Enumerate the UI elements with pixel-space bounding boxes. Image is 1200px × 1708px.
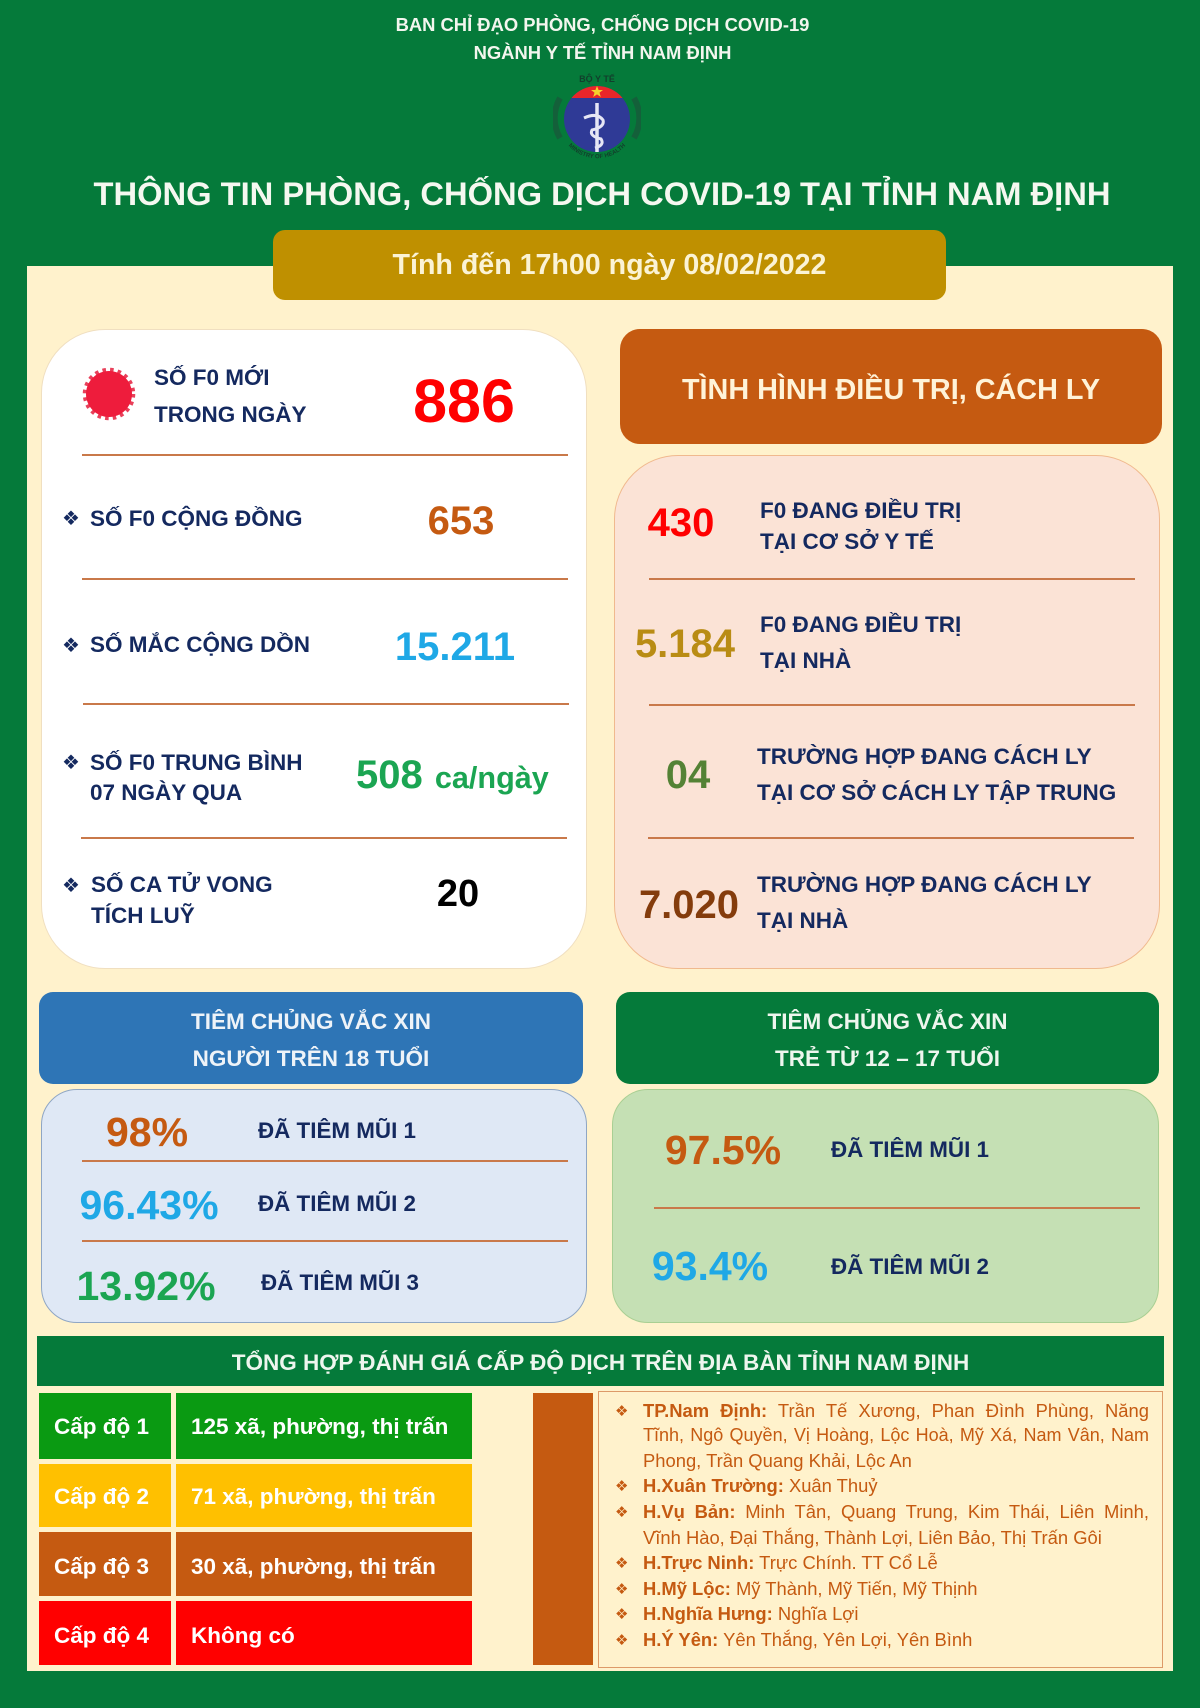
main title: THÔNG TIN PHÒNG, CHỐNG DỊCH COVID-19 TẠI TỈNH NAM ĐỊNH [94, 175, 1110, 212]
value: 97.5%: 97.5% [665, 1127, 781, 1173]
bullet: Nghia Hung: ❖ [615, 1605, 628, 1623]
level 2 name [39, 1464, 171, 1527]
level 4 name [39, 1601, 171, 1665]
level 2 name: Cấp độ 2 [54, 1484, 149, 1509]
header line 2: NGÀNH Y TẾ TỈNH NAM ĐỊNH [474, 42, 731, 63]
panel: cream background [27, 266, 1173, 1671]
value: 13.92%: 13.92% [76, 1263, 216, 1309]
level 3 name: Cấp độ 3 [54, 1554, 149, 1579]
panel: level 3 communes list [598, 1391, 1163, 1668]
value: 653: 653 [428, 499, 494, 543]
label: cumulative deaths: SỐ CA TỬ VONG [91, 872, 273, 897]
connector bar [533, 1393, 593, 1665]
value: 430: 430 [648, 501, 714, 545]
label: dose 3: ĐÃ TIÊM MŨI 3 [261, 1270, 419, 1295]
heading: vaccination adults: TIÊM CHỦNG VẮC XIN [191, 1009, 431, 1034]
value: 886: 886 [413, 367, 515, 435]
bullet: Xuan Truong: ❖ [615, 1477, 628, 1495]
label: dose 2: ĐÃ TIÊM MŨI 2 [258, 1191, 416, 1216]
text: Truc Ninh: H.Trực Ninh: Trực Chính. TT Cổ Lễ [643, 1552, 938, 1573]
heading: vaccination ages 12-17 [616, 992, 1159, 1084]
label: last seven days: 07 NGÀY QUA [90, 780, 242, 805]
label: dose 1: ĐÃ TIÊM MŨI 1 [831, 1137, 989, 1162]
bullet: My Loc: ❖ [615, 1580, 628, 1598]
text: Nam Dinh city line 3: Phong, Trần Quang Khải, Lộc An [643, 1450, 912, 1471]
label: quarantine cases at home: TRƯỜNG HỢP ĐANG CÁCH LY [757, 872, 1092, 897]
level 3 name [39, 1532, 171, 1596]
heading: treatment and quarantine [620, 329, 1162, 444]
level 3 count: 30 xã, phường, thị trấn [191, 1554, 436, 1579]
bullet: Truc Ninh: ❖ [615, 1554, 628, 1572]
label: dose 2: ĐÃ TIÊM MŨI 2 [831, 1254, 989, 1279]
icon: virus [82, 368, 136, 420]
icon: ministry of health emblem: MINISTRY OF HEALTH [568, 143, 626, 158]
text: Vu Ban line 1: H.Vụ Bản: Minh Tân, Quang Trung, Kim Thái, Liên Minh, [643, 1501, 1149, 1522]
heading: vaccination ages 12-17: TIÊM CHỦNG VẮC XIN [767, 1009, 1008, 1034]
level 2 count [176, 1464, 472, 1527]
label: at medical facilities: TẠI CƠ SỞ Y TẾ [760, 529, 934, 554]
text: Xuan Truong: H.Xuân Trường: Xuân Thuỷ [643, 1475, 878, 1496]
value: 7.020: 7.020 [639, 883, 739, 927]
date banner: Tính đến 17h00 ngày 08/02/2022 [393, 249, 826, 281]
level 4 count [176, 1601, 472, 1665]
bullet: deaths: ❖ [62, 873, 80, 897]
heading: treatment and quarantine: TÌNH HÌNH ĐIỀU TRỊ, CÁCH LY [682, 374, 1100, 406]
value: 508 per day: 508 ca/ngày [356, 753, 549, 797]
level 4 name: Cấp độ 4 [54, 1623, 149, 1648]
panel: adult vaccination [41, 1089, 587, 1323]
level 1 count: 125 xã, phường, thị trấn [191, 1414, 448, 1439]
heading: vaccination ages 12-17: TRẺ TỪ 12 – 17 TUỔI [775, 1046, 1000, 1071]
text: Y Yen: H.Ý Yên: Yên Thắng, Yên Lợi, Yên Bình [643, 1629, 972, 1650]
level 1 name [39, 1393, 171, 1459]
text: Nam Dinh city line 1: TP.Nam Định: Trần Tế Xương, Phan Đình Phùng, Năng [643, 1400, 1149, 1421]
value: 15.211: 15.211 [395, 625, 515, 669]
label: dose 1: ĐÃ TIÊM MŨI 1 [258, 1118, 416, 1143]
panel: treatment and quarantine [614, 455, 1160, 969]
level 4 count: Không có [191, 1623, 295, 1648]
label: in the day: TRONG NGÀY [154, 402, 307, 427]
label: cumulative cases: SỐ MẮC CỘNG DỒN [90, 632, 310, 657]
value: 98%: 98% [106, 1109, 188, 1155]
heading: epidemic level summary [37, 1336, 1164, 1386]
label: at concentrated facilities: TẠI CƠ SỞ CÁCH LY TẬP TRUNG [757, 780, 1116, 805]
panel: daily case statistics [41, 329, 587, 969]
label: at home: TẠI NHÀ [760, 648, 851, 673]
label: community F0: SỐ F0 CỘNG ĐỒNG [90, 506, 303, 531]
value: 04: 04 [666, 753, 710, 797]
value: 96.43%: 96.43% [79, 1182, 219, 1228]
value: 20: 20 [437, 873, 479, 915]
text: My Loc: H.Mỹ Lộc: Mỹ Thành, Mỹ Tiến, Mỹ Thịnh [643, 1578, 978, 1599]
value: 93.4%: 93.4% [652, 1243, 768, 1289]
text: Vu Ban line 2: Vĩnh Hào, Đại Thắng, Thành Lợi, Liên Bảo, Thị Trấn Gôi [643, 1527, 1102, 1548]
bullet: Vu Ban: ❖ [615, 1503, 628, 1521]
text: Nghia Hung: H.Nghĩa Hưng: Nghĩa Lợi [643, 1603, 858, 1624]
bullet: Y Yen: ❖ [615, 1631, 628, 1649]
label: treating at medical facilities: F0 ĐANG ĐIỀU TRỊ [760, 498, 961, 523]
bullet: cumulative: ❖ [62, 633, 80, 657]
table: epidemic levels [39, 1393, 472, 1665]
bullet: community: ❖ [62, 506, 80, 530]
label: seven day average: SỐ F0 TRUNG BÌNH [90, 750, 303, 775]
bullet: Nam Dinh city: ❖ [615, 1402, 628, 1420]
level 1 name: Cấp độ 1 [54, 1414, 149, 1439]
heading: vaccination adults [39, 992, 583, 1084]
panel: youth vaccination [612, 1089, 1159, 1323]
heading: vaccination adults: NGƯỜI TRÊN 18 TUỔI [193, 1046, 429, 1071]
level 1 count [176, 1393, 472, 1459]
label: cumulative: TÍCH LUỸ [91, 903, 195, 928]
label: at home: TẠI NHÀ [757, 908, 848, 933]
text: Nam Dinh city line 2: Tĩnh, Ngô Quyền, Vị Hoàng, Lộc Hoà, Mỹ Xá, Nam Vân, Nam [643, 1425, 1149, 1445]
level 2 count: 71 xã, phường, thị trấn [191, 1484, 436, 1509]
header line 1: BAN CHỈ ĐẠO PHÒNG, CHỐNG DỊCH COVID-19 [396, 14, 809, 35]
value: 5.184: 5.184 [635, 622, 735, 666]
heading: epidemic level summary: TỔNG HỢP ĐÁNH GIÁ CẤP ĐỘ DỊCH TRÊN ĐỊA BÀN TỈNH NAM ĐỊNH [232, 1350, 969, 1375]
bullet: seven day average: ❖ [62, 750, 80, 774]
label: quarantine cases: TRƯỜNG HỢP ĐANG CÁCH LY [757, 744, 1092, 769]
level 3 count [176, 1532, 472, 1596]
icon: ministry of health emblem: BỘ Y TẾ [579, 73, 615, 84]
icon: ministry of health emblem [553, 73, 641, 158]
label: treating at home: F0 ĐANG ĐIỀU TRỊ [760, 612, 961, 637]
label: new F0: SỐ F0 MỚI [154, 365, 269, 390]
date banner [273, 230, 946, 300]
